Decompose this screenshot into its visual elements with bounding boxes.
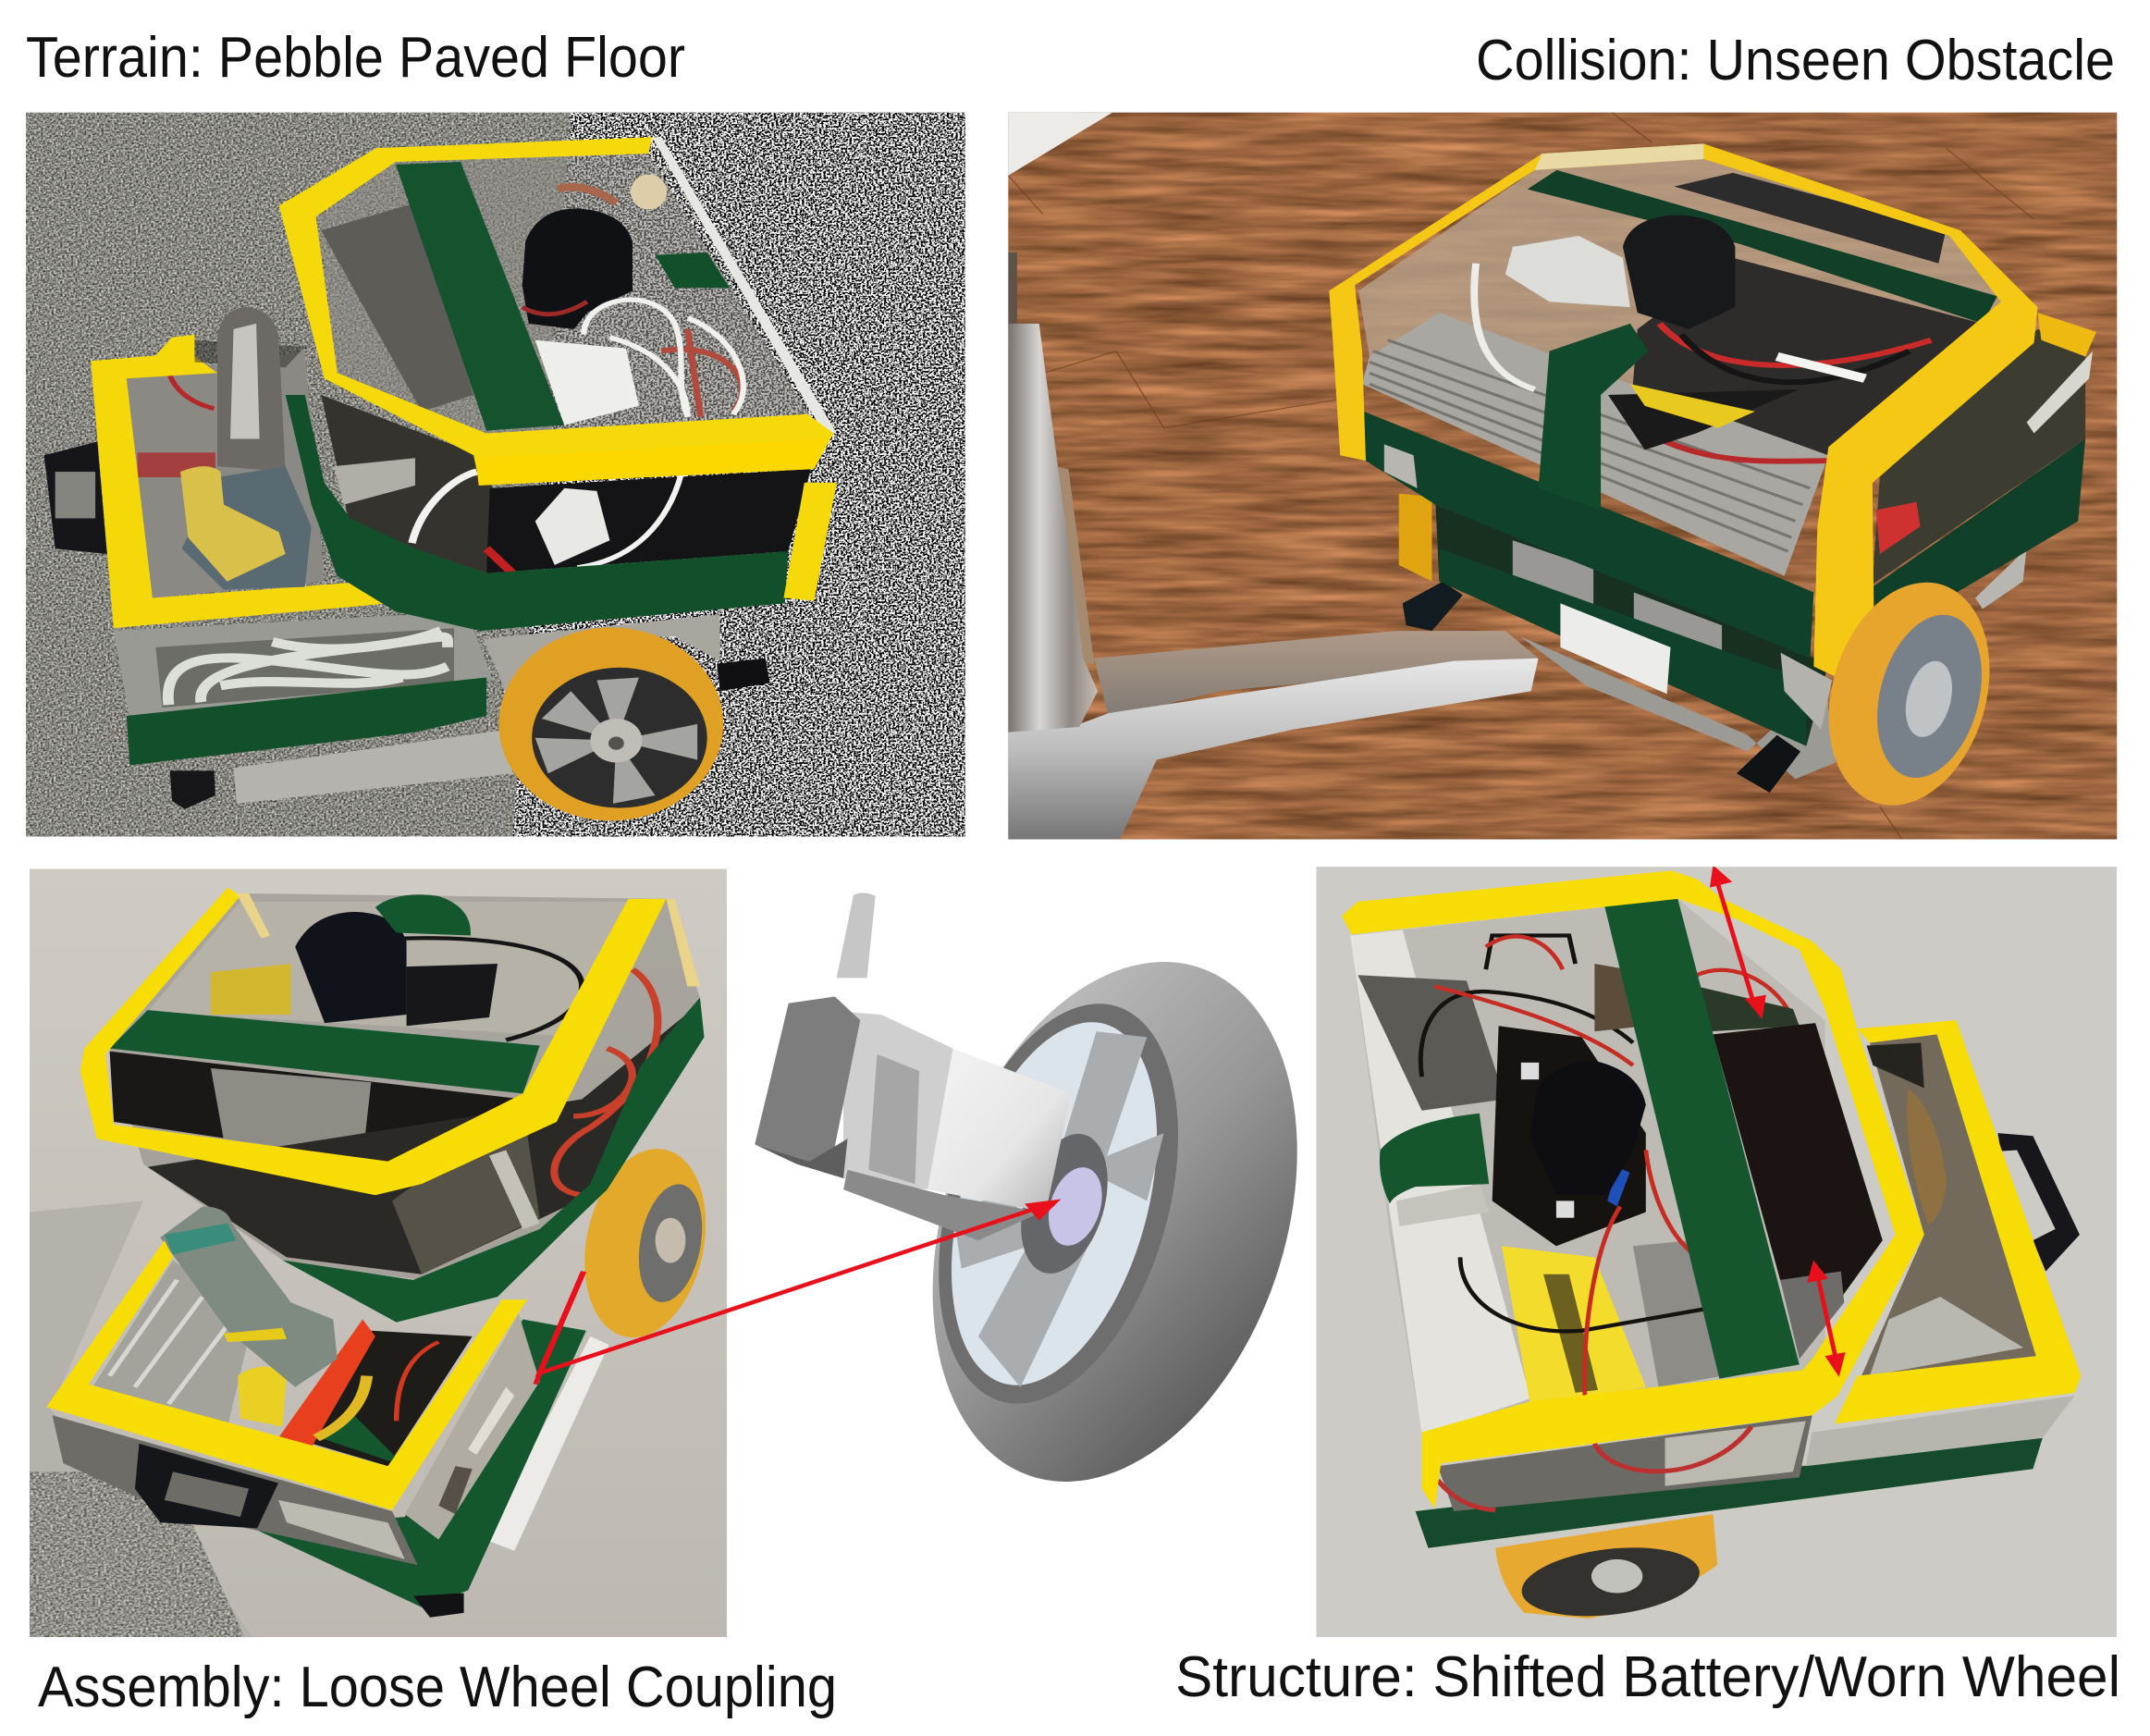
rear knob	[1403, 582, 1463, 631]
icon: lidar	[1623, 215, 1735, 329]
green strap	[110, 1010, 540, 1093]
front window	[53, 1415, 417, 1565]
front chassis	[1435, 505, 1832, 746]
green strap	[1604, 899, 1800, 1379]
knob	[717, 659, 770, 691]
green front panel	[1364, 412, 1813, 659]
panel: assembly photo	[30, 869, 1348, 1637]
upper compartment interior	[318, 137, 837, 434]
lower box	[92, 1206, 473, 1466]
top components	[1474, 236, 1931, 462]
icon: wheel	[1809, 573, 2009, 814]
green side strip	[127, 677, 486, 765]
icon: rear handle	[44, 441, 107, 554]
green side panel	[253, 1313, 586, 1607]
yellow bumper ring	[1329, 143, 2038, 680]
panel: collision photo	[1008, 113, 2117, 839]
CAD wheel and motor	[755, 893, 1348, 1499]
green vertical strap	[1539, 324, 1649, 511]
side panel	[1874, 313, 2096, 607]
motor body	[928, 1049, 1071, 1213]
handle	[135, 1444, 278, 1528]
icon: lidar	[295, 912, 407, 1023]
inner compartment under upper ring	[321, 395, 811, 573]
white base plate	[485, 1336, 608, 1551]
rear yellow caster	[1399, 494, 1431, 582]
upper cabin	[110, 893, 700, 1280]
base plate	[1520, 636, 1836, 779]
panel: structure photo	[1316, 865, 2117, 1637]
casters	[413, 1594, 464, 1618]
arrow: shifted battery bottom	[1807, 1260, 1846, 1377]
arrow: shifted battery top	[1710, 865, 1766, 1019]
caster	[170, 770, 215, 809]
icon: lidar	[1530, 1061, 1646, 1195]
power brick	[535, 340, 639, 425]
green band	[286, 395, 788, 631]
yellow upper ring	[80, 888, 700, 1195]
arrow: wheel coupling	[535, 1200, 1061, 1385]
bottle	[217, 307, 286, 472]
bottle	[160, 1206, 338, 1387]
label plate	[1560, 603, 1671, 694]
rear lower window	[1806, 1396, 2074, 1466]
lower chassis with cables	[114, 611, 493, 719]
green strap	[396, 162, 564, 431]
chair leg	[1008, 252, 1539, 839]
handle	[1997, 1133, 2080, 1272]
rear frame	[1835, 1020, 2081, 1423]
back panel	[1358, 159, 2001, 461]
heading: assembly: Assembly: Loose Wheel Coupling	[38, 1656, 837, 1719]
icon: wheel	[1495, 1514, 1717, 1625]
yellow upper ring	[279, 137, 833, 486]
panel: terrain photo	[26, 113, 965, 836]
front knob	[1737, 735, 1800, 793]
lower green skirt	[1416, 1438, 2043, 1548]
icon: wheel	[498, 628, 723, 820]
green tab	[1380, 1114, 1489, 1203]
yellow lower ring	[46, 1240, 527, 1510]
battery pack	[1713, 1023, 1883, 1302]
rear yellow frame and box	[91, 307, 389, 628]
yellow tab	[783, 483, 837, 600]
base plate	[234, 730, 512, 804]
heading: collision: Collision: Unseen Obstacle	[1476, 29, 2115, 92]
yellow bumper ring	[1342, 870, 1924, 1508]
icon: wheel	[571, 1145, 719, 1342]
cables and controller	[1420, 936, 1800, 1401]
battery heat sink	[1362, 313, 1828, 576]
heading: structure: Structure: Shifted Battery/Worn Wheel	[1175, 1645, 2120, 1709]
front window	[1438, 1415, 1812, 1511]
plate behind wheel	[484, 614, 720, 691]
heading: terrain: Terrain: Pebble Paved Floor	[26, 26, 685, 90]
green lower band	[283, 998, 705, 1323]
battery heat sink body	[1350, 899, 1825, 1435]
icon: lidar	[522, 208, 633, 329]
